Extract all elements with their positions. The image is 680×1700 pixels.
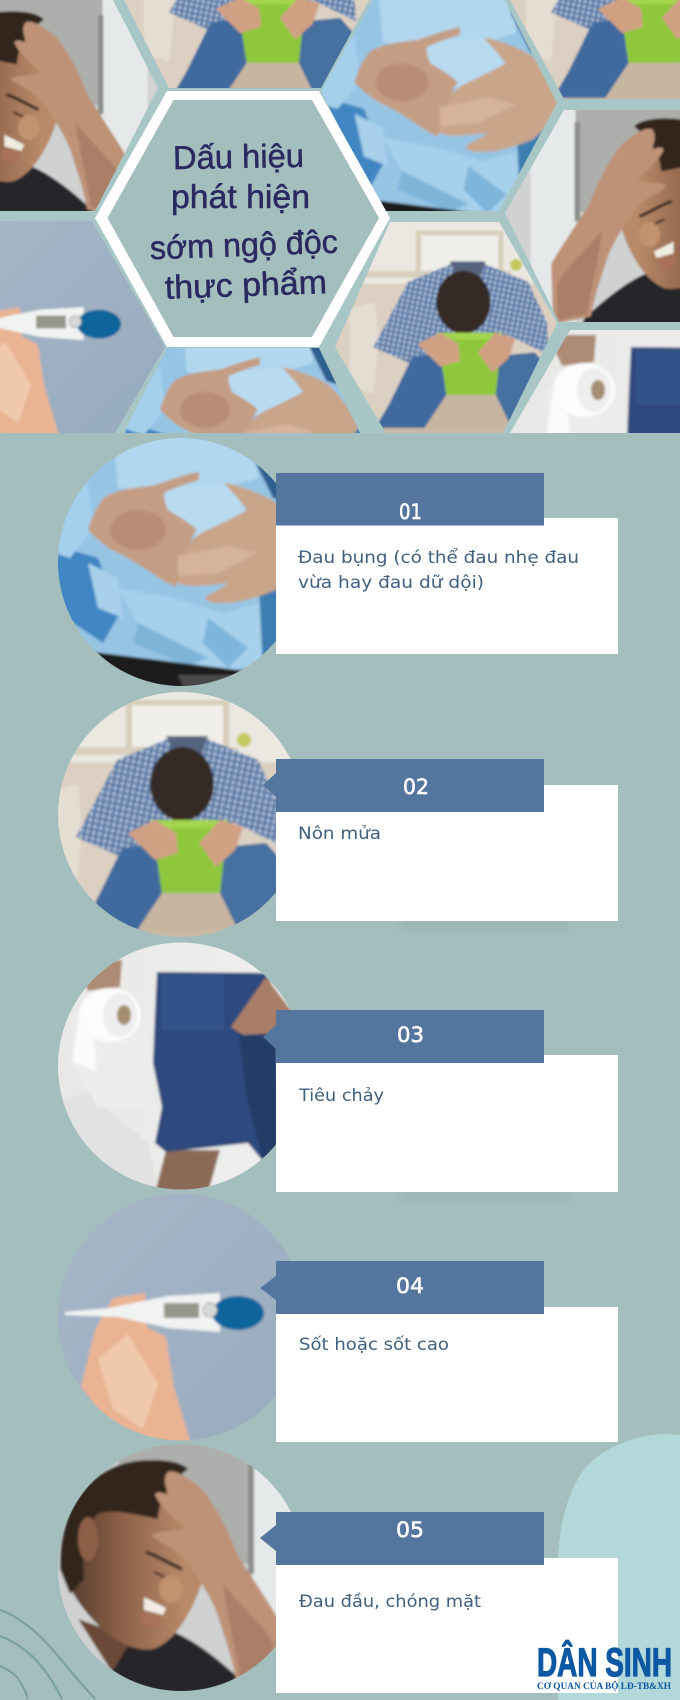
header: 05 bbox=[260, 1512, 544, 1565]
card: step 02 text bbox=[276, 785, 618, 921]
photo: bucket top bbox=[124, 0, 369, 88]
title: thực phẩm bbox=[164, 263, 327, 306]
header: 04 bbox=[260, 1261, 544, 1314]
title: Dấu hiệu bbox=[173, 137, 304, 176]
photo: bucket top right bbox=[510, 0, 680, 99]
card: step 01 text: vừa hay đau dữ dội) bbox=[298, 573, 484, 592]
photo circle: vomiting bbox=[58, 692, 290, 937]
card: step 02 text: Nôn mửa bbox=[298, 824, 381, 843]
photo circle: diarrhoea bbox=[58, 942, 290, 1190]
header: 03: 03 bbox=[397, 1023, 424, 1048]
photo circle: stomach pain bbox=[58, 438, 276, 686]
header: 02: 02 bbox=[403, 775, 429, 800]
panel: step 05 bbox=[58, 1444, 618, 1693]
card: step 01 text bbox=[276, 518, 618, 654]
title hexagon bbox=[95, 91, 390, 347]
header: 01 bbox=[276, 473, 544, 526]
photo: thermometer left bbox=[0, 221, 165, 433]
card shadow bbox=[400, 921, 570, 929]
photo: man with headache right bbox=[505, 110, 680, 322]
photo circle: thermometer bbox=[58, 1194, 290, 1440]
photo circle: headache bbox=[58, 1444, 291, 1691]
panel: step 02 bbox=[58, 692, 618, 1190]
card: step 03 text: Tiêu chảy bbox=[298, 1086, 384, 1105]
logo: Dân Sinh: CƠ QUAN CỦA BỘ LĐ-TB&XH bbox=[537, 1681, 671, 1691]
photo: stomach large bbox=[321, 0, 557, 211]
photo: man with headache top left bbox=[0, 0, 158, 211]
photo: bucket centre bbox=[335, 222, 557, 433]
card: step 04 text bbox=[276, 1307, 618, 1442]
header: 03 bbox=[263, 1010, 544, 1063]
header: 01: 01 bbox=[399, 500, 422, 525]
panel: step 03 bbox=[0, 823, 618, 1383]
title: sớm ngộ độc bbox=[149, 223, 338, 266]
title: phát hiện bbox=[171, 178, 310, 215]
card: step 01 text: Đau bụng (có thể đau nhẹ đau bbox=[298, 548, 579, 567]
panel: hero photo collage bbox=[0, 0, 680, 433]
header: 04: 04 bbox=[396, 1274, 424, 1299]
decorative curved lines bbox=[0, 1610, 95, 1699]
panel: step 04 bbox=[58, 1194, 618, 1442]
header: 05: 05 bbox=[396, 1518, 424, 1543]
panel: step 01 bbox=[58, 438, 618, 686]
photo: toilet roll bbox=[510, 330, 680, 433]
card: step 05 text: Đau đầu, chóng mặt bbox=[299, 1592, 482, 1611]
card: step 04 text: Sốt hoặc sốt cao bbox=[299, 1335, 449, 1354]
card: step 03 text bbox=[276, 1055, 618, 1192]
card: step 05 text bbox=[276, 1558, 618, 1693]
photo: stomach bottom bbox=[124, 348, 360, 433]
decorative light corner shape bbox=[558, 1434, 680, 1700]
header: 02 bbox=[263, 759, 544, 812]
card shadow bbox=[400, 1192, 570, 1200]
title bbox=[149, 137, 338, 306]
